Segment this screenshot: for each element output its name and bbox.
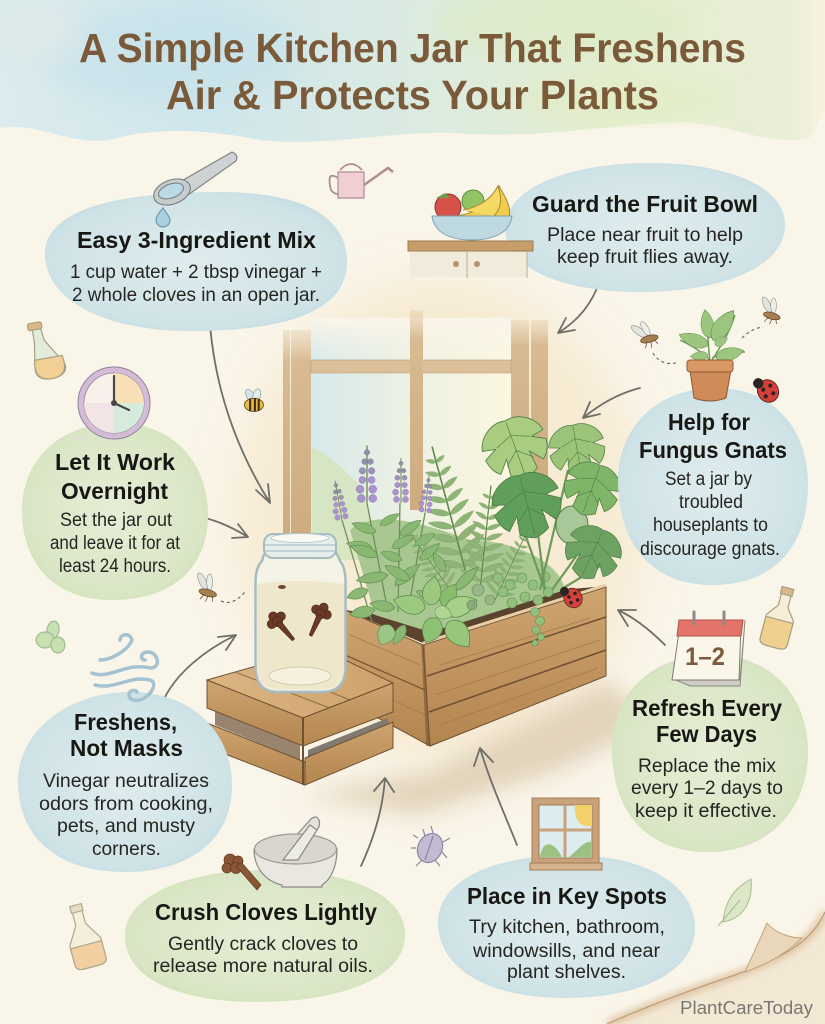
icon: gnat left [628,318,660,352]
panel: crush cloves lightly: Gently crack cloves to [168,934,358,955]
panel: help for fungus gnats: Help for [668,409,750,435]
icon: clove by mortar [222,854,261,890]
icon: vinegar bottle top left [27,319,67,381]
panel: refresh every few days: keep it effective. [635,801,777,822]
panel: place in key spots [438,855,695,998]
monstera [475,409,629,590]
panel: help for fungus gnats: Set a jar by [665,469,752,490]
panel: let it work overnight [22,423,208,600]
panel: let it work overnight: least 24 hours. [59,556,171,577]
icon: gnat by jar [190,570,221,604]
panel: refresh every few days [612,655,808,852]
panel: freshens not masks [18,692,232,872]
panel: guard the fruit bowl: Place near fruit to help [547,225,743,246]
icon: potted plant with gnats [677,306,745,401]
panel: freshens not masks: odors from cooking, [39,794,213,815]
panel: freshens not masks: Not Masks [70,735,183,761]
window light haze [235,280,645,760]
panel: easy 3-ingredient mix: Easy 3-Ingredient Mix [77,227,316,253]
icon: bottle right [759,584,802,651]
icon: green leaf [718,879,751,926]
icon: ladybug by pot [751,371,783,406]
panel: place in key spots: windowsills, and near [472,941,661,962]
page curl corner [607,912,825,1024]
panel: place in key spots: plant shelves. [507,962,626,983]
icon: beetle [411,826,450,867]
icon: wind swirl [92,635,157,700]
icon: bee by window [244,388,263,412]
lavender [328,446,435,622]
panel: let it work overnight: Set the jar out [60,510,173,531]
panel: guard the fruit bowl: Guard the Fruit Bowl [532,191,758,217]
panel: guard the fruit bowl [505,163,785,292]
small wooden crate [207,648,393,785]
icon: pink watering can [330,164,393,198]
icon: bottle bottom left [60,901,107,971]
panel: let it work overnight: Overnight [61,478,168,504]
panel: freshens not masks: pets, and musty [57,816,196,837]
watermark: PlantCareToday [680,998,813,1018]
foliage mass [350,519,565,632]
panel: place in key spots: Place in Key Spots [467,883,667,909]
panel: easy 3-ingredient mix [45,192,347,331]
panel: help for fungus gnats: Fungus Gnats [639,437,787,463]
table shadow [300,680,650,815]
title: A Simple Kitchen Jar That Freshens [79,25,746,71]
panel: easy 3-ingredient mix: 1 cup water + 2 tbsp vinegar + [70,262,322,283]
panel: let it work overnight: and leave it for at [50,533,181,554]
icon: calendar 1-2 [672,612,745,686]
ladybug on planter [558,581,586,611]
panel: guard the fruit bowl: keep fruit flies away. [557,247,733,268]
panel: let it work overnight: Let It Work [55,449,175,475]
title: Air & Protects Your Plants [166,72,659,118]
panel: freshens not masks: Freshens, [74,709,177,735]
title [79,25,746,118]
icon: calendar 1-2: 1–2 [685,643,725,671]
panel: help for fungus gnats: houseplants to [653,515,768,536]
plants [328,409,629,654]
dashed flight paths [221,327,763,602]
panel: crush cloves lightly [125,870,405,1002]
panel: refresh every few days: Replace the mix [638,756,777,777]
panel: crush cloves lightly: Crush Cloves Lightly [155,899,377,925]
window frame [283,310,548,560]
panel: freshens not masks: corners. [92,839,161,860]
herb leaves [345,510,481,648]
fern [397,439,542,607]
panel: crush cloves lightly: release more natural oils. [153,956,373,977]
panel: refresh every few days: every 1–2 days to [631,778,783,799]
glass jar with cloves [255,534,346,692]
icon: mortar and pestle [254,817,337,887]
large wooden planter [345,585,606,746]
panel: place in key spots: Try kitchen, bathroom, [469,917,665,938]
icon: small window [530,798,602,870]
scene: window, crates, plants, jar [207,280,650,815]
panel: easy 3-ingredient mix: 2 whole cloves in an open jar. [72,285,320,306]
icon: butterfly left [36,620,65,653]
icon: measuring spoon with drop [150,152,237,227]
panel: refresh every few days: Refresh Every [632,695,782,721]
small round-leaf trailing plant [467,572,553,646]
panel: freshens not masks: Vinegar neutralizes [43,771,209,792]
panel: help for fungus gnats: troubled [679,492,743,513]
icon: gnat right [754,294,785,326]
icon: fruit bowl on shelf [408,186,533,278]
basil leaves [391,575,480,654]
icon: clock [78,367,150,439]
watercolor header wash [0,0,825,142]
panel: refresh every few days: Few Days [656,721,757,747]
arrows [165,280,665,866]
panel: help for fungus gnats: discourage gnats. [640,539,780,560]
panel: help for fungus gnats [618,388,808,585]
